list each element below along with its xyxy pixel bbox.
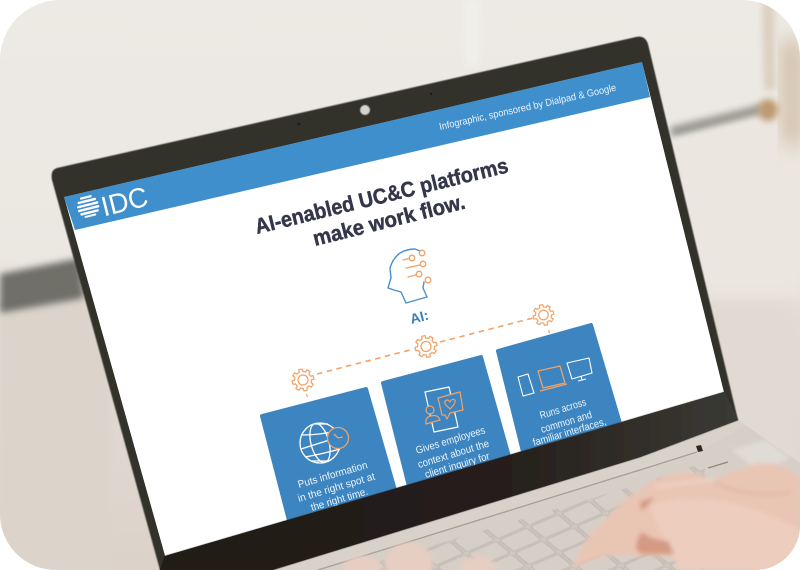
card 2 text: Gives employees (414, 424, 487, 457)
icon: gear center (414, 334, 438, 358)
card 2 text: context about the (416, 438, 491, 471)
AI label: AI: (408, 307, 430, 327)
blue header bar (64, 62, 650, 230)
icon: gear left (291, 368, 315, 392)
title line two: make work flow. (310, 190, 468, 251)
hand typing on keyboard (572, 463, 800, 570)
keyboard keys (380, 466, 705, 570)
bezel lower edge overlay (160, 392, 738, 570)
icon: tablet (518, 374, 534, 396)
connector right segment (440, 318, 533, 342)
keyboard deck (272, 420, 800, 570)
card 1 text: Puts information (296, 459, 369, 491)
icon: AI head (388, 249, 431, 303)
gear ticks (306, 330, 550, 397)
icon: speech bubble with heart (438, 392, 463, 419)
icon: clock (328, 428, 348, 448)
panel: card 3 (498, 325, 640, 520)
icon: striped globe (77, 195, 100, 218)
card 3 text: Runs across (538, 396, 588, 422)
card 1 text: the right time. (309, 486, 369, 514)
card 3 text: familiar interfaces, (531, 416, 608, 449)
IDC wordmark: IDC (98, 181, 151, 222)
title: AI-enabled UC&C platforms (252, 154, 511, 239)
card 1 text: in the right spot at (296, 471, 377, 505)
camera sensor dots (298, 93, 432, 125)
card 2 text: client inquiry for (423, 450, 492, 481)
card 3 text: common and (539, 409, 594, 436)
finger shadow (636, 532, 674, 554)
hand knuckle highlight (650, 498, 800, 570)
icon: gear right (532, 304, 554, 326)
icon: phone (425, 387, 458, 432)
IDC logo (77, 188, 148, 218)
icon: globe (300, 421, 340, 465)
webcam (360, 105, 370, 115)
icon: monitor (567, 358, 592, 381)
sponsor line: Infographic, sponsored by Dialpad & Google (438, 83, 618, 133)
fingers at bottom of keyboard (343, 543, 496, 570)
panel: card 1 (260, 387, 396, 520)
hinge dot (696, 445, 703, 452)
hinge shadow line (318, 452, 697, 570)
panel: card 2 (381, 355, 510, 485)
deck slot line (708, 462, 728, 468)
white screen background (64, 62, 724, 556)
dashed connector (317, 318, 533, 374)
palm rest area (736, 442, 786, 464)
card 2 text (414, 424, 492, 481)
hinge strip (272, 420, 745, 570)
laptop screen (64, 62, 724, 570)
icon: laptop (538, 366, 567, 391)
orange circuit lines (403, 250, 431, 283)
bottom bezel shading (160, 418, 738, 570)
card 3 text (531, 396, 608, 449)
icon: person (426, 406, 440, 424)
